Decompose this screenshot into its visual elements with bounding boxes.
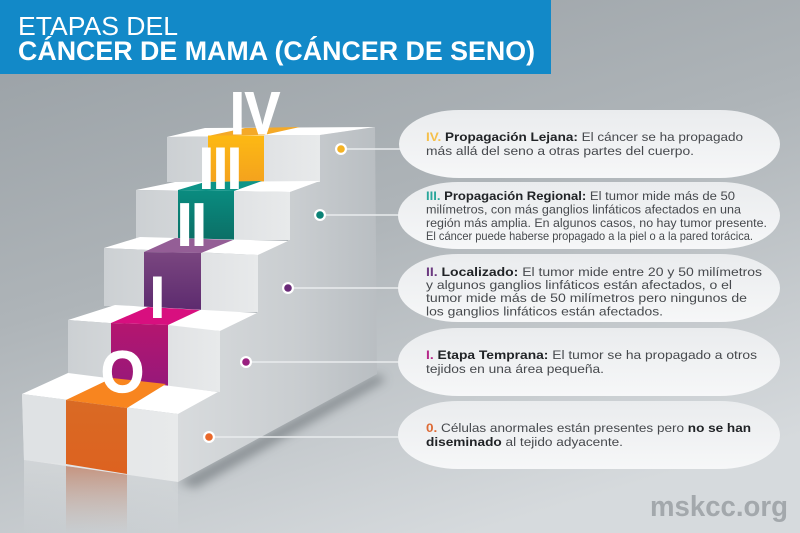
step II xyxy=(104,237,288,312)
panel: stage II: tumor mide más de 50 milímetros pero ningunos de xyxy=(426,291,747,305)
panel: stage II: los ganglios linfáticos están afectados. xyxy=(426,304,663,318)
panel: stage III: III. Propagación Regional: El tumor mide más de 50 xyxy=(426,189,735,203)
panel: stage III: El cáncer puede haberse propagado a la piel o a la pared torácica. xyxy=(426,229,753,243)
title line 1: ETAPAS DEL xyxy=(18,13,178,41)
dot 0 xyxy=(203,431,215,443)
connector lines xyxy=(209,149,400,437)
dot III xyxy=(314,209,326,221)
side wall xyxy=(178,127,377,482)
panel: stage II: y algunos ganglios linfáticos están afectados, o el xyxy=(426,278,732,292)
panel: stage IV: IV. Propagación Lejana: El cáncer se ha propagado xyxy=(426,130,743,144)
step 0 xyxy=(22,373,218,482)
orange reflection xyxy=(66,466,127,533)
numeral I: I xyxy=(149,264,166,331)
panel: stage 0: 0. Células anormales están presentes pero no se han xyxy=(426,421,751,435)
staircase xyxy=(22,127,386,533)
panel: stage I: tejidos en una área pequeña. xyxy=(426,362,604,376)
floor shadow xyxy=(178,374,386,488)
panel: stage I xyxy=(398,328,780,396)
dot IV xyxy=(335,143,347,155)
floor reflection xyxy=(24,460,178,533)
dot II xyxy=(282,282,294,294)
step I xyxy=(68,305,257,392)
numeral 0: O xyxy=(101,340,144,405)
panel: stage II xyxy=(398,254,780,322)
panel: stage IV: más allá del seno a otras partes del cuerpo. xyxy=(426,144,694,158)
panel: stage III xyxy=(398,182,780,249)
title line 2: CÁNCER DE MAMA (CÁNCER DE SENO) xyxy=(18,36,535,66)
dot I xyxy=(240,356,252,368)
numeral IV: IV xyxy=(230,80,280,147)
panel: stage III: milímetros, con más ganglios linfáticos afectados en una xyxy=(426,202,741,216)
step III xyxy=(136,181,320,240)
panel: stage II: II. Localizado: El tumor mide entre 20 y 50 milímetros xyxy=(426,265,762,279)
panel: stage III: región más amplia. En algunos casos, no hay tumor presente. xyxy=(426,216,767,230)
numeral II: II xyxy=(176,191,205,260)
website label: mskcc.org xyxy=(650,491,788,523)
panel: stage I: I. Etapa Temprana: El tumor se ha propagado a otros xyxy=(426,348,757,362)
panel: stage 0 xyxy=(398,401,780,469)
panel: stage 0: diseminado al tejido adyacente. xyxy=(426,435,623,449)
numeral III: III xyxy=(198,135,240,202)
panel: stage IV xyxy=(399,110,780,178)
step IV xyxy=(167,127,375,182)
title banner xyxy=(0,0,551,74)
